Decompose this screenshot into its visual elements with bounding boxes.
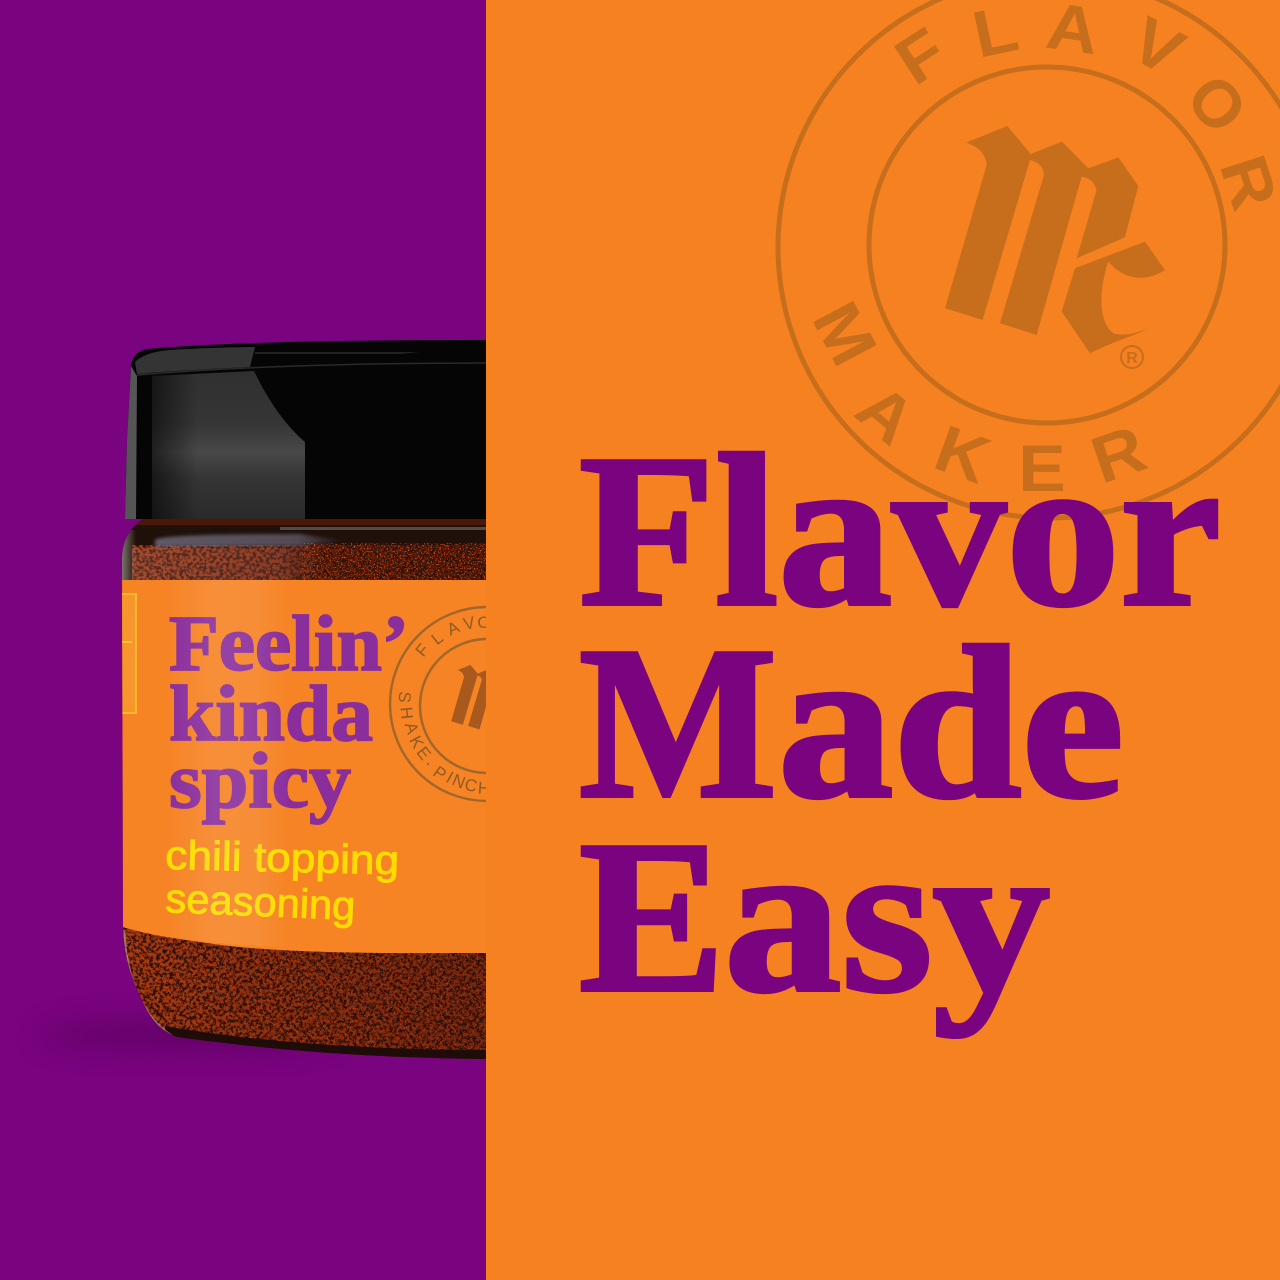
seal text: S [395, 690, 414, 703]
flavor maker seal [778, 0, 1280, 518]
seal text: P [430, 762, 450, 784]
seal text: flavor maker [798, 0, 1280, 505]
seal text: C [463, 775, 479, 796]
seal text: · [420, 755, 437, 772]
seal text [398, 616, 486, 794]
seal text: H [477, 779, 491, 798]
headline line 2: ade [778, 603, 1124, 844]
seal text: flavor maker: O [1172, 60, 1262, 147]
seal text: I [443, 768, 456, 787]
headline line 3: asy [724, 797, 1050, 1038]
label headline: Feelin’ [169, 601, 409, 688]
seal text: A [401, 720, 422, 737]
label headline [169, 601, 409, 825]
lower powder [123, 926, 486, 1059]
seal text: flavor maker: K [926, 411, 999, 498]
seal text: O [477, 613, 491, 632]
seal text: A [444, 617, 463, 639]
glass neck reflections [122, 519, 488, 582]
seal text: flavor maker: E [1018, 431, 1066, 505]
seal text: E [413, 743, 435, 764]
jar glass body [115, 518, 490, 1064]
label headline: kinda [169, 671, 373, 758]
lid rim highlight [135, 347, 255, 374]
label subtitle [165, 832, 400, 929]
label seal [388, 606, 486, 802]
label [120, 580, 490, 953]
lid left edge highlight [125, 366, 137, 519]
headline line 1: F [579, 411, 715, 652]
jar lid [125, 340, 490, 519]
seal text: F [412, 640, 433, 660]
headline [579, 411, 1221, 1038]
inner ring [869, 67, 1225, 423]
upper powder [132, 543, 488, 582]
headline line 2 [579, 603, 1124, 844]
seal text: N [450, 770, 468, 793]
panel: purple background [0, 0, 486, 1280]
lid grey reflection [152, 371, 305, 519]
seal monogram [451, 665, 486, 730]
label sheen [182, 580, 277, 946]
outer ring [778, 0, 1280, 518]
headline line 2: M [579, 603, 777, 844]
seal text: V [462, 613, 477, 634]
registered mark: R [1126, 350, 1138, 367]
seal text: flavor maker: F [882, 13, 959, 99]
registered mark [1121, 346, 1143, 368]
seal text: flavor maker: V [1119, 2, 1196, 90]
label headline: spicy [169, 738, 351, 825]
seal text: L [428, 628, 447, 649]
headline line 3: E [579, 797, 725, 1038]
seal text: flavor maker: A [843, 369, 930, 459]
product jar [122, 519, 486, 1059]
headline line 3 [579, 797, 1050, 1038]
seal text: flavor maker: M [798, 290, 891, 377]
monogram [945, 126, 1165, 353]
label subtitle: seasoning [165, 875, 356, 929]
panel: orange background [486, 0, 1280, 1280]
jar floor shadow [40, 1021, 340, 1049]
seal text: H [397, 706, 417, 720]
headline line 1: lavor [715, 411, 1221, 652]
seal text: K [406, 733, 428, 752]
label subtitle: chili topping [165, 832, 400, 883]
seal text: flavor maker: R [1082, 411, 1155, 498]
label mini panel [121, 594, 136, 713]
